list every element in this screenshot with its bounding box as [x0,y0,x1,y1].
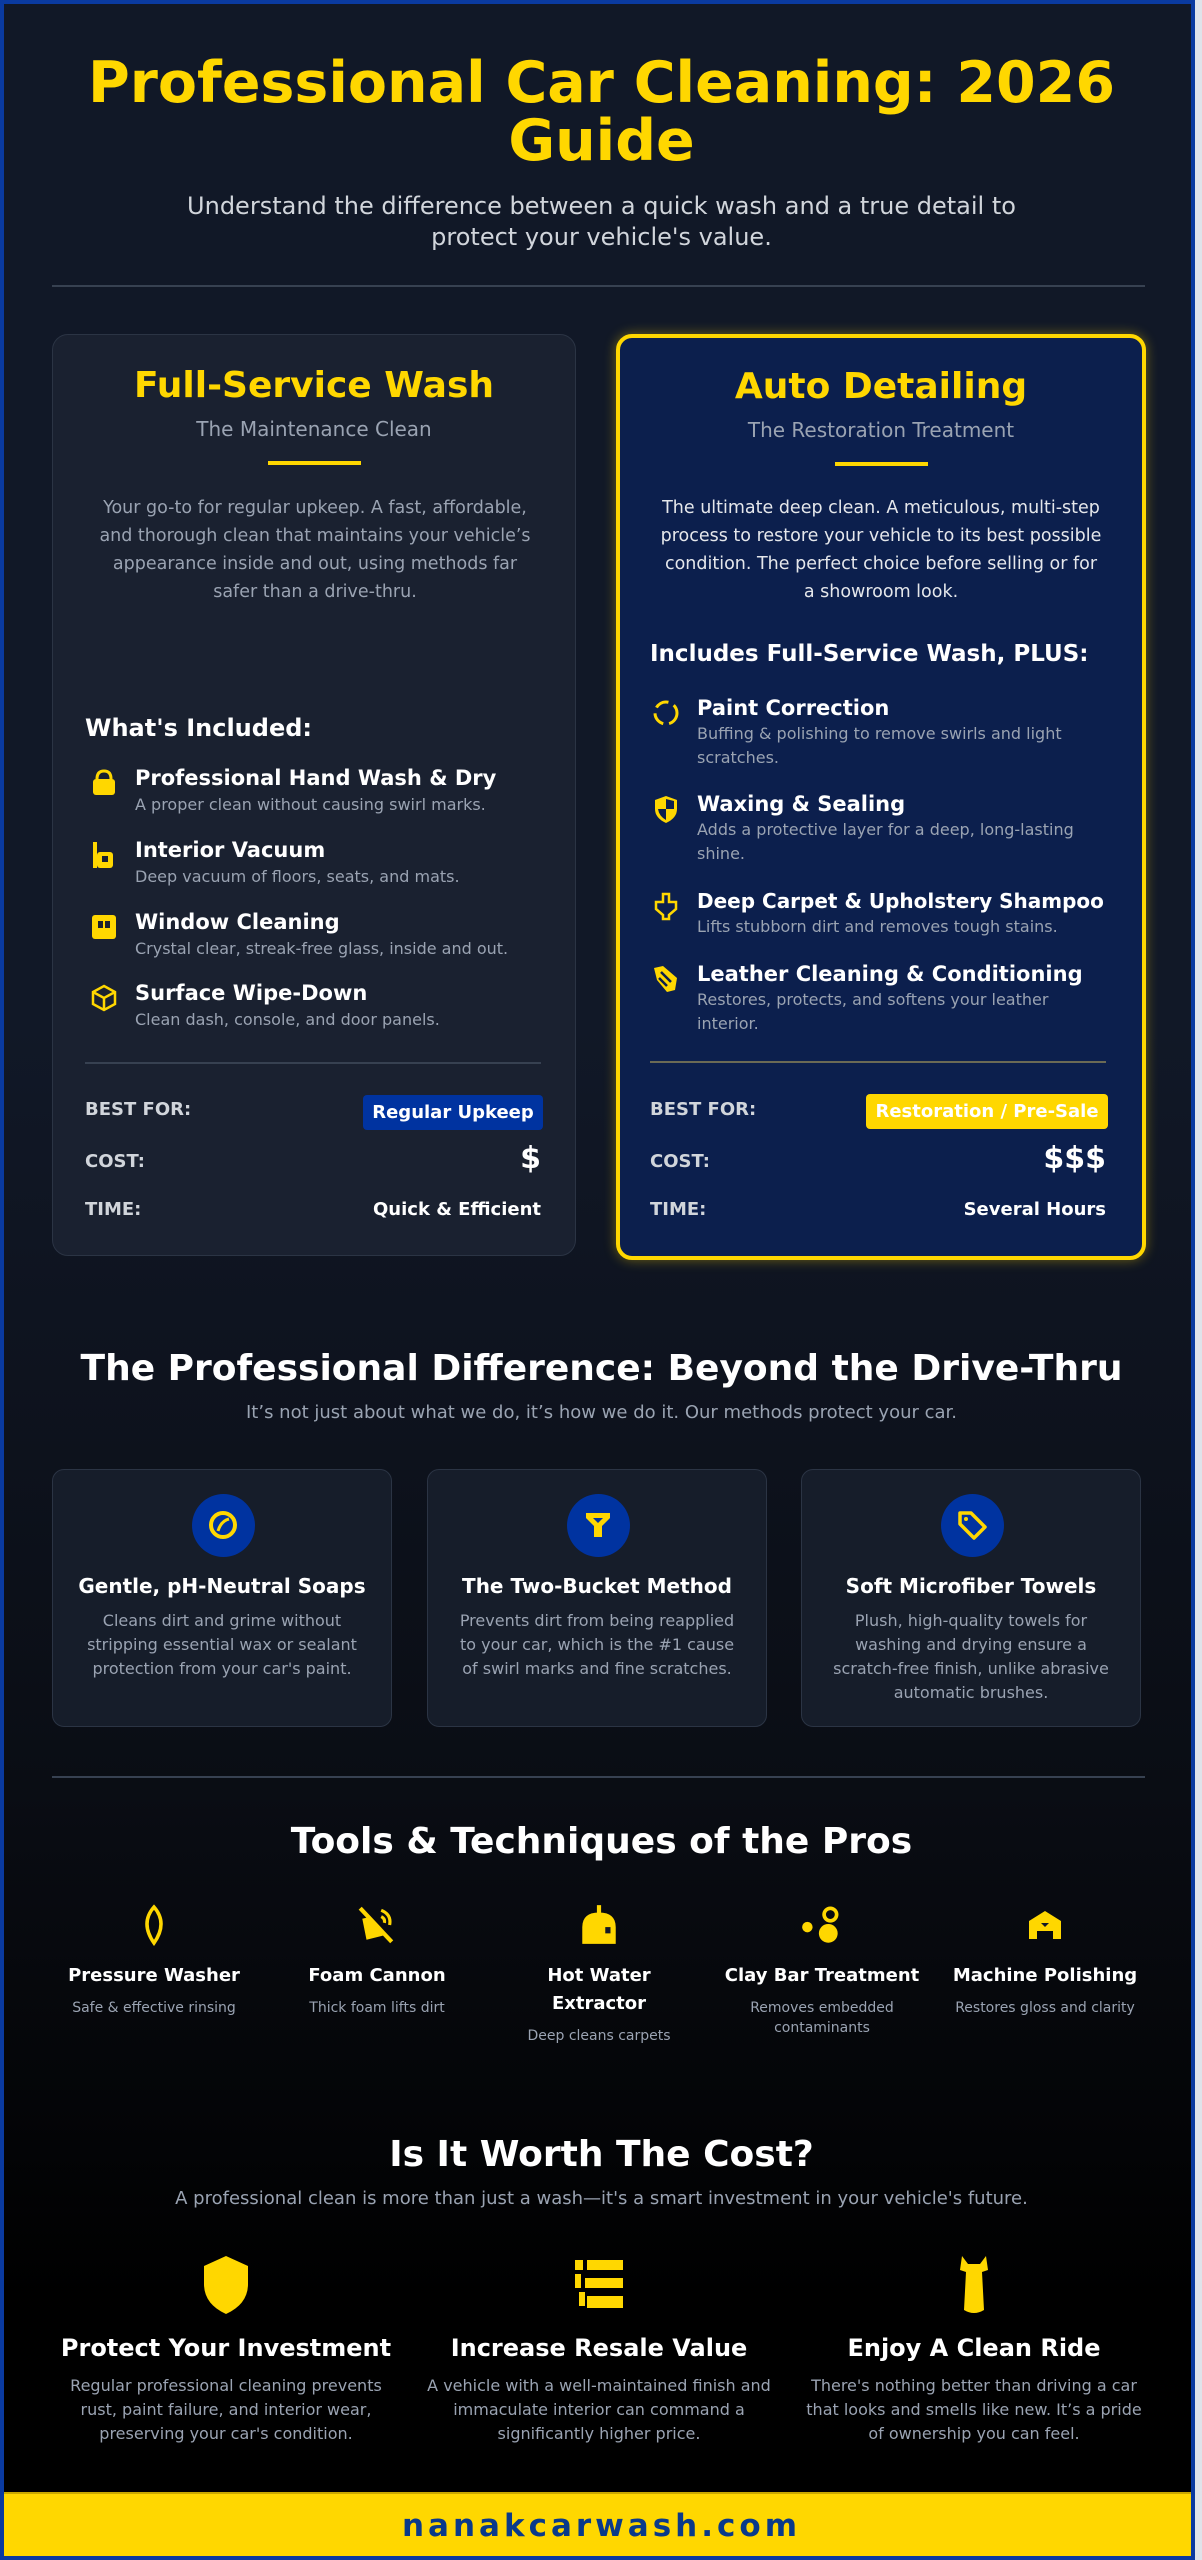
item: vacuum [93,838,460,886]
tool: hot water extractor: Extractor [552,1993,646,2014]
footer [4,2492,1199,2560]
heading: tools: Tools & Techniques of the Pros [291,1821,912,1862]
tool: clay bar: Removes embedded [750,2000,894,2016]
item: hand wash: A proper clean without causing swirl marks. [135,795,486,814]
item: window: Crystal clear, streak-free glass, inside and out. [135,939,508,958]
item: vacuum: Deep vacuum of floors, seats, and mats. [135,867,460,886]
card title: Full-Service Wash [134,365,494,406]
tool: machine polishing: Machine Polishing [953,1965,1137,1986]
card subtitle: The Restoration Treatment [748,418,1014,442]
item: window: Window Cleaning [135,910,340,934]
tool: clay bar: contaminants [774,2020,870,2036]
badge: regular upkeep: Regular Upkeep [372,1102,534,1123]
item: wipe-down: Clean dash, console, and door panels. [135,1010,440,1029]
footer: nanakcarwash.com [402,2508,801,2544]
item: hand wash: Professional Hand Wash & Dry [135,766,496,790]
label: time: TIME: [85,1199,141,1220]
badge: restoration: Restoration / Pre-Sale [875,1101,1099,1122]
item: leather [654,962,1083,1033]
item: leather: Restores, protects, and softens your leather interior. [697,990,1048,1033]
item: vacuum: Interior Vacuum [135,838,325,862]
panel: two-bucket: The Two-Bucket Method [462,1574,732,1598]
subheading: A professional clean is more than just a wash—it's a smart investment in your vehicle's future. [175,2188,1028,2209]
panel: soaps: Gentle, pH-Neutral Soaps [78,1574,366,1598]
label: cost: COST: [85,1151,145,1172]
panel: two-bucket: Prevents dirt from being reapplied to your car, which is the #1 cause of swirl marks and fine scratches. [460,1611,734,1678]
panel: soaps [52,1469,392,1727]
subheading: It’s not just about what we do, it’s how we do it. Our methods protect your car. [246,1402,957,1423]
benefit: protect: Regular professional cleaning prevents rust, paint failure, and interior wear, preserving your car's condition. [70,2376,382,2443]
item: window [92,910,508,958]
title: Professional Car Cleaning: 2026 [88,50,1115,116]
tool: pressure washer: Safe & effective rinsing [72,2000,236,2016]
tool: clay bar [725,1906,919,2036]
panel: full-service wash [52,334,576,1256]
icon: funnel [567,1494,630,1557]
heading: worth the cost: Is It Worth The Cost? [389,2134,814,2175]
card title: Auto Detailing [735,366,1027,407]
badge: regular upkeep [363,1095,543,1130]
benefit: resale: Increase Resale Value [451,2334,747,2362]
subtitle: Understand the difference between a quick wash and a true detail to protect your vehicle's value. [187,192,1016,251]
item: wipe-down [92,981,440,1029]
description: The ultimate deep clean. A meticulous, multi-step process to restore your vehicle to its best possible condition. The perfect choice before selling or for a showroom look. [661,498,1101,602]
benefit: clean ride: There's nothing better than driving a car that looks and smells like new. It’s a pride of ownership you can feel. [806,2376,1142,2443]
heading: what's included: What's Included: [85,714,312,742]
item: wipe-down: Surface Wipe-Down [135,981,367,1005]
benefit: protect [61,2256,391,2443]
item: waxing: Adds a protective layer for a deep, long-lasting shine. [697,820,1074,863]
label: best for: BEST FOR: [650,1099,756,1120]
item: paint correction [654,696,1062,767]
benefit: resale [427,2260,771,2443]
tool: clay bar: Clay Bar Treatment [725,1965,919,1986]
benefit: resale: A vehicle with a well-maintained finish and immaculate interior can command a significantly higher price. [427,2376,771,2443]
item: hand wash [93,766,496,814]
tool: hot water extractor: Deep cleans carpets [527,2028,671,2044]
icon: tag [941,1494,1004,1557]
value: cost: $ [520,1141,541,1176]
tool: pressure washer [68,1904,240,2016]
panel: microfiber [801,1469,1141,1727]
panel: soaps: Cleans dirt and grime without stripping essential wax or sealant protection from your car's paint. [87,1611,357,1678]
item: leather: Leather Cleaning & Conditioning [697,962,1083,986]
benefit: protect: Protect Your Investment [61,2334,391,2362]
item: shampoo: Deep Carpet & Upholstery Shampoo [697,889,1104,913]
tool: foam cannon: Thick foam lifts dirt [309,2000,445,2016]
item: paint correction: Buffing & polishing to remove swirls and light scratches. [697,724,1062,767]
benefit: clean ride: Enjoy A Clean Ride [847,2334,1101,2362]
card subtitle: The Maintenance Clean [196,417,432,441]
tool: pressure washer: Pressure Washer [68,1965,240,1986]
tool: foam cannon: Foam Cannon [308,1965,446,1986]
item: waxing [655,792,1074,863]
item: shampoo: Lifts stubborn dirt and removes tough stains. [697,917,1058,936]
heading: professional difference: The Professional Difference: Beyond the Drive-Thru [81,1348,1122,1389]
panel: microfiber: Soft Microfiber Towels [846,1574,1096,1598]
tool: foam cannon [308,1906,446,2016]
description: Your go-to for regular upkeep. A fast, affordable, and thorough clean that maintains your vehicle’s appearance inside and out, using methods far safer than a drive-thru. [99,498,531,602]
value: time: Several Hours [964,1199,1106,1220]
item: shampoo [654,889,1104,936]
badge: restoration [866,1094,1108,1129]
tool: hot water extractor: Hot Water [547,1965,651,1986]
benefit: clean ride [806,2256,1142,2443]
panel: auto detailing [616,334,1146,1260]
item: paint correction: Paint Correction [697,696,889,720]
title: Guide [508,108,695,174]
item: waxing: Waxing & Sealing [697,792,905,816]
heading: includes plus: Includes Full-Service Wash, PLUS: [650,641,1088,667]
label: time: TIME: [650,1199,706,1220]
label: best for: BEST FOR: [85,1099,191,1120]
panel: microfiber: Plush, high-quality towels for washing and drying ensure a scratch-free finish, unlike abrasive automatic brushes. [833,1611,1109,1702]
value: time: Quick & Efficient [373,1199,541,1220]
tool: machine polishing [953,1911,1137,2016]
tool: machine polishing: Restores gloss and clarity [955,2000,1135,2016]
value: cost: $$$ [1043,1141,1106,1176]
title [88,50,1115,174]
icon: leaf drop [192,1494,255,1557]
label: cost: COST: [650,1151,710,1172]
tool: hot water extractor [527,1905,671,2044]
panel: two-bucket [427,1469,767,1727]
